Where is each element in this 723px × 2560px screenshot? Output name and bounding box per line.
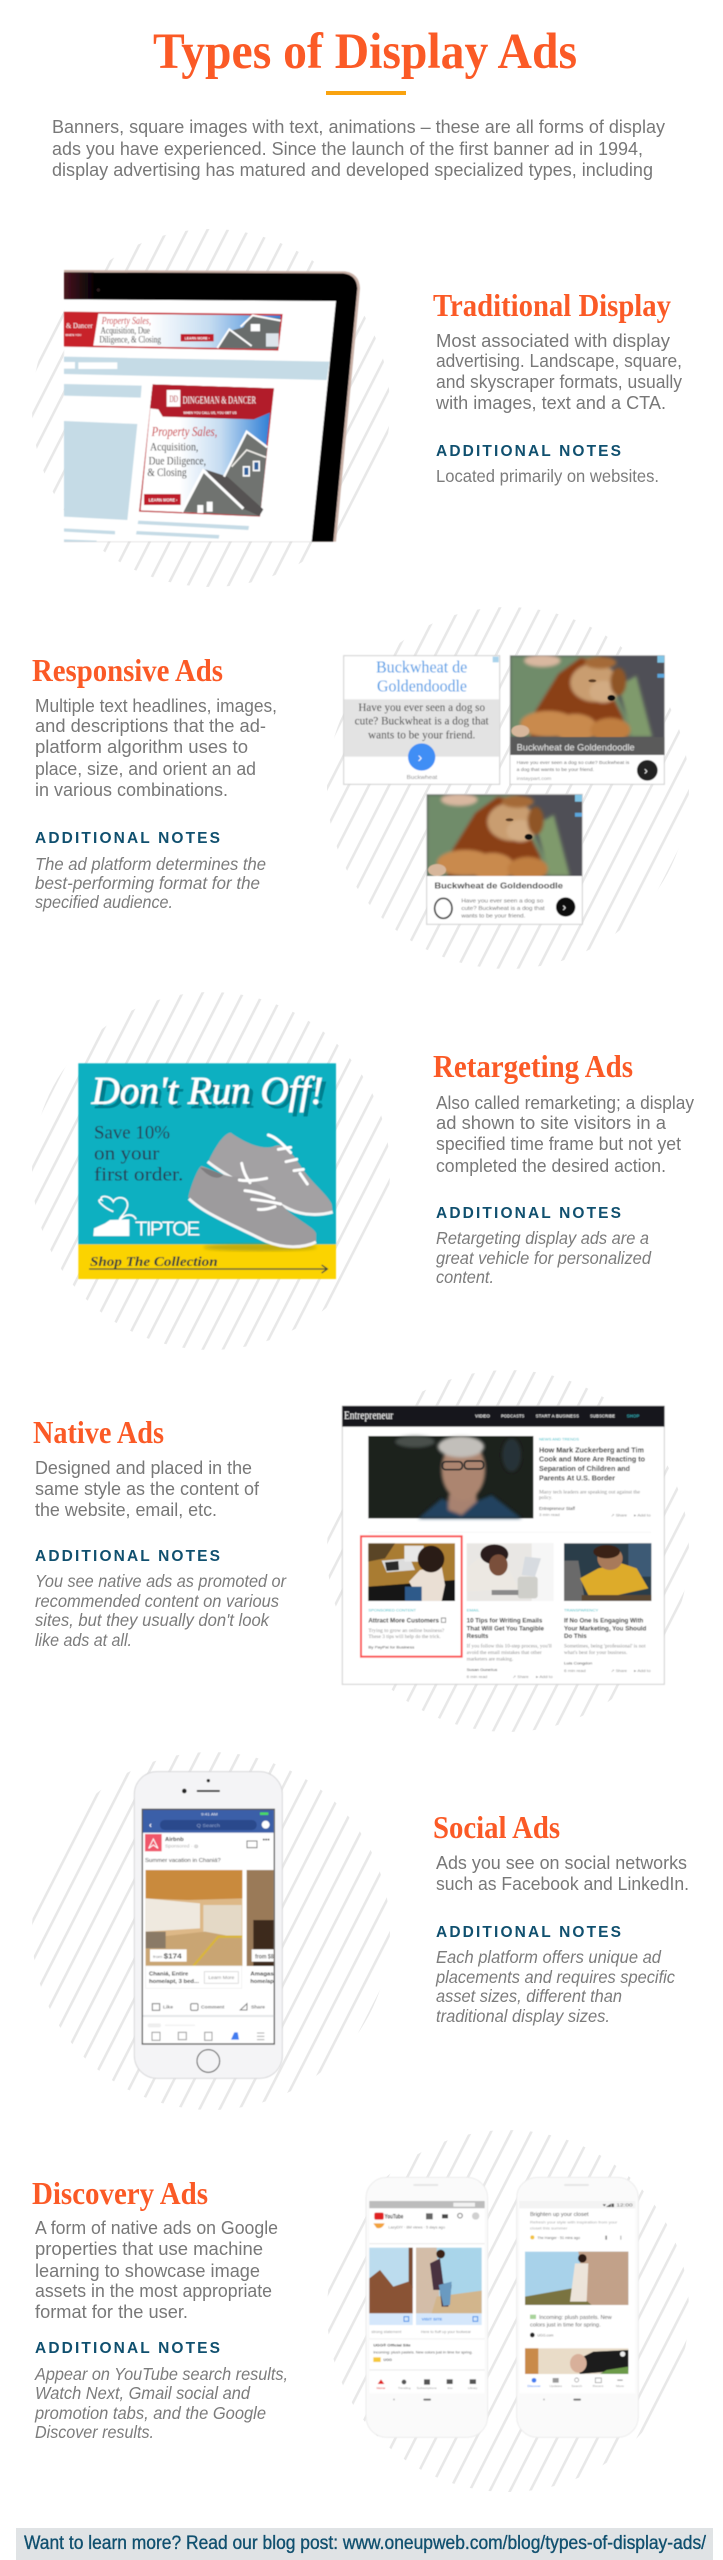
advertiser row: Airbnb	[165, 1837, 184, 1843]
additional notes text	[35, 1571, 287, 1650]
square ad: & Closing	[147, 465, 187, 479]
title underline	[326, 91, 406, 95]
intro text: display advertising has matured and developed specialized types, including	[52, 159, 653, 180]
column: sponsored native ad: These 3 tips will help do the trick.	[368, 1635, 441, 1640]
ad: text variant: cute? Buckwheat is a dog that	[355, 714, 489, 728]
additional notes heading: ADDITIONAL NOTES	[35, 2340, 220, 2357]
description	[436, 1852, 689, 1894]
laptop with banner ads	[64, 270, 360, 542]
CTA strip: strong statement	[371, 2330, 401, 2334]
description: ad shown to site visitors in a	[436, 1112, 667, 1133]
square ad: WHEN YOU CALL US, YOU GET US	[183, 410, 237, 415]
column: transparency: If No One Is Engaging With	[564, 1618, 644, 1624]
responsive ad examples	[344, 655, 664, 924]
column: transparency: 6 min read	[564, 1668, 586, 1673]
ad copy: UGG® Official Site	[373, 2342, 411, 2347]
intro text	[52, 116, 666, 180]
column: transparency: ▸ Add to	[634, 1668, 652, 1673]
site header	[342, 1406, 664, 1427]
shoes	[188, 1133, 333, 1251]
discover copy: colors just in time for spring.	[530, 2322, 601, 2328]
banner ad: Don't Run Off: Shop The Collection	[90, 1254, 218, 1269]
ad: image variant with overlay: Have you ever seen a dog so cute? Buckwheat is	[517, 760, 630, 765]
banner ad: Don't Run Off: first order.	[94, 1165, 183, 1186]
advertiser row: •••	[263, 1837, 270, 1844]
ad copy	[369, 2338, 485, 2371]
additional notes heading: ADDITIONAL NOTES	[35, 830, 220, 847]
discover bottom nav: Recent	[593, 2384, 604, 2388]
hero article: ▸ Add to	[634, 1513, 652, 1518]
additional notes text	[435, 1947, 675, 2026]
ad: text variant: Have you ever seen a dog so	[358, 700, 485, 714]
square ad: Due Diligence,	[149, 453, 206, 467]
additional notes text: You see native ads as promoted or	[35, 1571, 287, 1591]
description	[435, 330, 683, 413]
hero article: ➚ Share	[611, 1513, 628, 1518]
column: transparency: Luis Congdon	[564, 1661, 592, 1666]
hero photo	[368, 1436, 533, 1518]
site header: Entrepreneur	[344, 1410, 394, 1422]
banner ad: Don't Run Off: on your	[94, 1143, 160, 1164]
leaderboard ad	[64, 312, 283, 351]
intro text: ads you have experienced. Since the launch of the first banner ad in 1994,	[52, 138, 643, 159]
square ad: LEARN MORE ›	[149, 498, 178, 503]
leaderboard ad: Property Sales,	[101, 316, 151, 327]
phone: Google Discover	[517, 2177, 638, 2437]
description	[35, 2217, 278, 2322]
heading: retargeting ads: Retargeting Ads	[433, 1048, 633, 1084]
panel: social ads	[32, 1752, 689, 2110]
additional notes text: traditional display sizes.	[436, 2006, 610, 2026]
additional notes text: Retargeting display ads are a	[436, 1228, 649, 1248]
YouTube header	[369, 2212, 485, 2244]
column: transparency: what's best for your business.	[564, 1651, 627, 1656]
phone screen: 9:41 AM	[201, 1811, 218, 1816]
tiptoe logo	[93, 1196, 200, 1240]
ad: image variant with overlay: instaypart.com	[517, 776, 552, 781]
carousel photo one: from	[153, 1955, 162, 1959]
ad: text variant: ›	[418, 749, 423, 765]
description: Most associated with display	[436, 330, 671, 351]
ad: image variant with card: ›	[562, 902, 566, 914]
panel: responsive ads	[32, 607, 689, 969]
carousel photo two: from $8	[255, 1954, 274, 1961]
additional notes text: Appear on YouTube search results,	[34, 2364, 288, 2384]
heading: social ads: Social Ads	[433, 1809, 560, 1845]
striped circle background	[32, 1752, 390, 2110]
banner ad: Don't Run Off: Don't Run Off!	[95, 1072, 327, 1116]
discover card one: Brighten up your closet	[530, 2212, 589, 2218]
phone mockups	[366, 2177, 638, 2437]
carousel photo one: $174	[164, 1952, 183, 1961]
description	[35, 1457, 260, 1520]
phone screen: Q Search	[197, 1823, 220, 1828]
heading: responsive ads: Responsive Ads	[32, 652, 223, 688]
leaderboard ad: LEARN MORE ›	[185, 337, 210, 341]
additional notes text: content.	[436, 1267, 494, 1287]
description: platform algorithm uses to	[35, 736, 248, 757]
additional notes text	[436, 1228, 652, 1287]
column: email tips	[467, 1543, 554, 1679]
YouTube bottom nav: Subscriptions	[417, 2386, 437, 2390]
YouTube bottom nav: Trending	[398, 2386, 411, 2390]
reactions row: Like	[163, 2004, 173, 2009]
column: email tips: If you follow this 10-step process, you'll	[467, 1645, 552, 1650]
site header: SHOP	[627, 1414, 639, 1419]
additional notes heading: ADDITIONAL NOTES	[436, 443, 621, 460]
discover card one: The Hanger · 51 mins ago	[537, 2236, 580, 2240]
description: assets in the most appropriate	[35, 2280, 272, 2301]
tab bar icons	[148, 2023, 264, 2040]
additional notes heading: ADDITIONAL NOTES	[436, 1924, 621, 1941]
additional notes heading: ADDITIONAL NOTES	[436, 1205, 621, 1222]
panel: retargeting ads	[32, 992, 695, 1350]
footer call to action	[16, 2528, 713, 2560]
phone screen: ‹	[149, 1820, 152, 1830]
description: Also called remarketing; a display	[436, 1092, 695, 1113]
additional notes text: great vehicle for personalized	[436, 1248, 652, 1268]
site header: START A BUSINESS	[536, 1414, 579, 1419]
panel: traditional display	[32, 229, 683, 587]
column: email tips: ➚ Share	[513, 1674, 529, 1679]
ad: image variant with overlay: Buckwheat de Goldendoodle	[517, 742, 635, 752]
hero article: Parents At U.S. Border	[539, 1473, 615, 1482]
ad: text variant: Goldendoodle	[377, 677, 467, 696]
column: email tips: Susan Gunelius	[467, 1667, 497, 1672]
description: Multiple text headlines, images,	[35, 695, 277, 716]
column: sponsored native ad: Trying to grow an online business?	[368, 1629, 444, 1634]
hero article: policy.	[539, 1496, 552, 1501]
ad: image variant with card: cute? Buckwheat is a dog that	[461, 906, 545, 912]
additional notes text: best-performing format for the	[35, 873, 260, 893]
description: specified time frame but not yet	[436, 1133, 681, 1154]
YouTube header: YouTube	[385, 2214, 404, 2221]
column: transparency: TRANSPARENCY	[564, 1608, 599, 1613]
column: email tips: 6 min read	[467, 1674, 487, 1679]
discover bottom nav: More	[616, 2384, 624, 2388]
description	[35, 695, 277, 800]
panel: discovery ads	[32, 2130, 689, 2492]
discover card one: Refresh your style with inspiration from your	[530, 2220, 618, 2225]
discover copy	[530, 2315, 613, 2338]
additional notes text: The ad platform determines the	[35, 854, 266, 874]
discover bottom nav: Updates	[549, 2384, 563, 2388]
column: email tips: Results	[467, 1634, 489, 1640]
YouTube bottom nav: Library	[468, 2386, 478, 2390]
carousel captions: Amagas	[250, 1971, 274, 1977]
square ad: DINGEMAN & DANCER	[183, 395, 256, 406]
carousel image one	[369, 2248, 413, 2313]
column: email tips: That Will Get You Tangible	[467, 1626, 545, 1632]
discover image one	[525, 2252, 628, 2305]
column: transparency: ➚ Share	[611, 1668, 628, 1673]
banner ad: Don't Run Off: Save 10%	[94, 1122, 170, 1143]
reactions row: Comment	[201, 2004, 225, 2009]
additional notes heading: ADDITIONAL NOTES	[35, 1548, 220, 1565]
description: the website, email, etc.	[35, 1499, 217, 1520]
carousel captions	[146, 1966, 274, 1988]
site header: PODCASTS	[501, 1414, 524, 1419]
intro text: Banners, square images with text, animations – these are all forms of display	[52, 116, 666, 137]
carousel captions: Chaniá, Entire	[149, 1971, 188, 1977]
ad: image variant with card: Have you ever seen a dog so	[461, 899, 543, 905]
discover copy: UGG.com	[537, 2334, 553, 2338]
discover bottom nav: Search	[571, 2384, 582, 2388]
site header: VIDEO	[475, 1414, 491, 1419]
ad copy: Incoming: plush pastels. New colors just in time for spring.	[373, 2350, 473, 2354]
description: and skyscraper formats, usually	[436, 371, 683, 392]
leaderboard ad: & Dancer	[66, 321, 93, 330]
ad: text variant: Buckwheat de	[376, 658, 467, 677]
hero article: Entrepreneur Staff	[539, 1506, 576, 1511]
description: completed the desired action.	[436, 1155, 666, 1176]
panel: native ads	[33, 1370, 689, 1732]
description: Designed and placed in the	[35, 1457, 252, 1478]
tiptoe logo: TIPTOE	[135, 1217, 200, 1240]
site header: SUBSCRIBE	[590, 1414, 615, 1419]
description: such as Facebook and LinkedIn.	[436, 1873, 689, 1894]
carousel captions: home/ap	[250, 1979, 274, 1985]
leaderboard ad: Acquisition, Due	[101, 326, 150, 336]
square ad: DD	[169, 395, 178, 405]
description: and descriptions that the ad-	[35, 715, 266, 736]
advertiser row: Summer vacation in Chaniá?	[145, 1858, 221, 1864]
description: Ads you see on social networks	[436, 1852, 687, 1873]
square ad: Property Sales,	[151, 424, 217, 439]
additional notes text: Located primarily on websites.	[436, 466, 659, 486]
additional notes text: Watch Next, Gmail social and	[35, 2383, 251, 2403]
striped circle background	[32, 229, 390, 587]
column: sponsored native ad	[368, 1543, 455, 1650]
YouTube bottom nav: Inbox	[447, 2386, 453, 2390]
additional notes text: placements and requires specific	[435, 1967, 675, 1987]
YouTube bottom nav	[377, 2379, 478, 2401]
discover copy: Incoming: plush pastels. New	[539, 2315, 613, 2321]
phone with Facebook ad	[134, 1772, 282, 2078]
ad copy: UGG	[383, 2358, 392, 2362]
hero article: Many tech leaders are speaking out against the	[539, 1490, 641, 1495]
YouTube header: LazyDIY · 8M views · 5 days ago	[388, 2225, 446, 2230]
discover card one: closet this summer	[530, 2225, 568, 2230]
hero article: How Mark Zuckerberg and Tim	[539, 1445, 644, 1454]
additional notes text: Discover results.	[35, 2422, 154, 2442]
leaderboard ad: Diligence, & Closing	[99, 335, 161, 345]
ad: image variant with overlay: a dog that wants to be your friend.	[517, 767, 594, 772]
carousel captions: Learn More	[208, 1975, 235, 1980]
column: email tips: 10 Tips for Writing Emails	[467, 1618, 543, 1624]
column: email tips: EMAIL	[467, 1608, 480, 1613]
hero article: Cook and More Are Reacting to	[539, 1455, 645, 1464]
advertiser row	[145, 1834, 270, 1864]
description	[436, 1092, 695, 1176]
column: sponsored native ad: By PayPal for Business	[368, 1645, 414, 1650]
description: place, size, and orient an ad	[35, 758, 256, 779]
column: transparency: Your Marketing, You Should	[564, 1626, 647, 1632]
ad: text variant: wants to be your friend.	[368, 727, 475, 741]
hero article	[539, 1437, 652, 1518]
striped circle background	[32, 992, 390, 1350]
square ad: Acquisition,	[150, 440, 198, 454]
advertiser row: Sponsored · ◍	[165, 1844, 199, 1849]
carousel photo one	[146, 1870, 242, 1966]
description: advertising. Landscape, square,	[436, 350, 682, 371]
description: same style as the content of	[35, 1478, 260, 1499]
additional notes text	[35, 854, 266, 912]
banner ad: Don't Run Off: Don't Run Off!	[91, 1068, 323, 1112]
heading: native ads: Native Ads	[33, 1414, 164, 1450]
phone: Google Discover: ▾◢▮ 12:00	[603, 2203, 634, 2208]
description: in various combinations.	[35, 779, 228, 800]
description: format for the user.	[35, 2301, 188, 2322]
hero article: Separation of Children and	[539, 1464, 630, 1473]
hero article: 3 min read	[539, 1512, 560, 1517]
phone: YouTube	[366, 2177, 488, 2437]
column: transparency: Do This	[564, 1634, 587, 1640]
striped circle background	[327, 607, 689, 969]
ad: image variant with card: wants to be your friend.	[461, 913, 525, 919]
ad: text variant: Buckwheat	[407, 775, 438, 781]
column: email tips: marketers are making.	[467, 1657, 513, 1662]
reactions row	[143, 2004, 274, 2017]
description: with images, text and a CTA.	[435, 392, 666, 413]
hero article: NEWS AND TRENDS	[539, 1437, 579, 1442]
carousel photo two	[247, 1870, 274, 1966]
discover bottom nav	[527, 2378, 624, 2401]
ad: image variant with card: Buckwheat de Goldendoodle	[434, 881, 563, 891]
banner ad: Don't Run Off	[78, 1063, 336, 1279]
column: transparency: Sometimes, being 'professional' is not	[564, 1645, 646, 1650]
phone screen	[142, 1809, 274, 2044]
additional notes text: sites, but they usually don't look	[35, 1610, 270, 1630]
ad: image variant with overlay	[510, 655, 664, 784]
CTA strip: Here to fluff up your footwear	[421, 2330, 472, 2334]
additional notes text: like ads at all.	[35, 1630, 132, 1650]
additional notes text: asset sizes, different than	[436, 1986, 622, 2006]
highlight box	[361, 1536, 462, 1657]
description: properties that use machine	[35, 2238, 263, 2259]
column: transparency	[564, 1543, 652, 1673]
column: sponsored native ad: Attract More Customers	[368, 1618, 440, 1624]
description: A form of native ads on Google	[35, 2217, 278, 2238]
additional notes text: specified audience.	[35, 892, 173, 912]
carousel image two	[416, 2248, 482, 2313]
ad: text variant	[344, 656, 500, 784]
reactions row: Share	[251, 2004, 265, 2009]
additional notes text	[34, 2364, 288, 2442]
description: learning to showcase image	[35, 2260, 260, 2281]
additional notes text: Each platform offers unique ad	[436, 1947, 662, 1967]
striped circle background	[327, 1370, 689, 1732]
ad: image variant with card	[427, 794, 582, 924]
discover card one	[530, 2212, 621, 2240]
heading: traditional display: Traditional Display	[433, 287, 671, 323]
title: Types of Display Ads	[153, 24, 577, 80]
column: email tips: ▸ Add to	[536, 1674, 554, 1679]
square ad	[139, 384, 274, 517]
CTA strip: VISIT SITE	[422, 2317, 443, 2322]
CTA strip	[369, 2313, 482, 2334]
carousel captions: home/apt, 3 bed...	[149, 1979, 200, 1985]
column: email tips: avoid the email mistakes that other	[467, 1651, 542, 1656]
striped circle background	[327, 2130, 689, 2492]
additional notes text: recommended content on various	[35, 1591, 279, 1611]
additional notes text: promotion tabs, and the Google	[34, 2403, 266, 2423]
website screenshot: Entrepreneur	[342, 1406, 664, 1684]
YouTube bottom nav: Home	[377, 2386, 386, 2390]
page layout blocks	[64, 357, 329, 542]
leaderboard ad: WHEN YOU	[65, 333, 81, 337]
heading: discovery ads: Discovery Ads	[32, 2175, 208, 2211]
discover bottom nav: Discover	[527, 2384, 541, 2388]
column: sponsored native ad: SPONSORED CONTENT	[368, 1608, 417, 1613]
ad: image variant with overlay: ›	[644, 765, 648, 777]
discover image two	[525, 2348, 628, 2374]
